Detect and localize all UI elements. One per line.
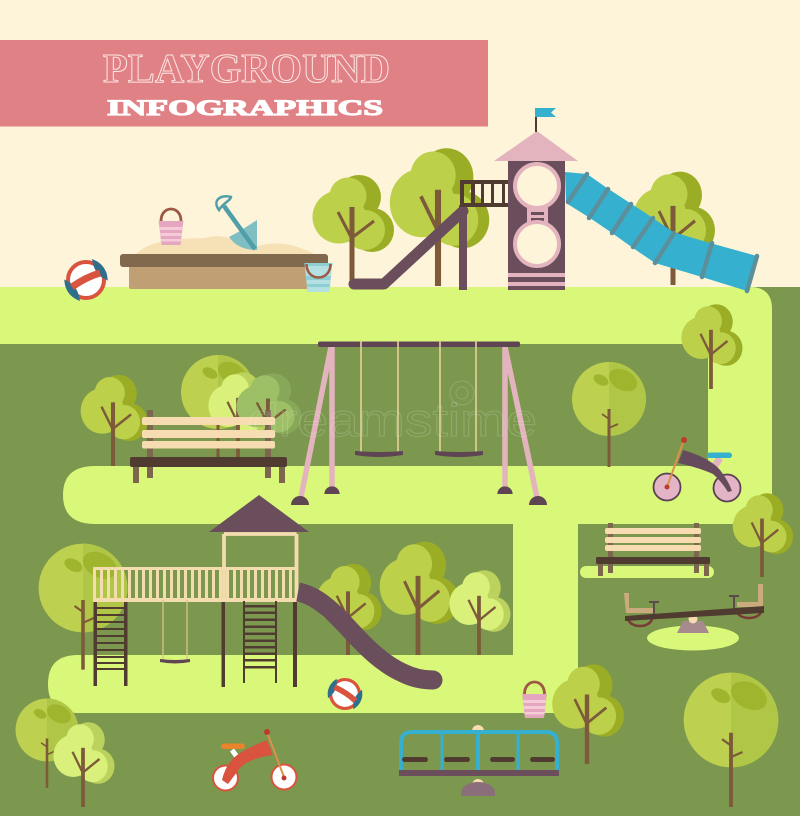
icon: beach ball lower <box>324 673 366 715</box>
tree <box>312 175 394 281</box>
tree mid <box>316 564 382 655</box>
tree left of bench <box>81 375 147 466</box>
wavy slide <box>298 592 433 680</box>
pale tree behind bench <box>208 372 270 457</box>
icon: beach ball top <box>66 262 106 298</box>
tower flag <box>535 108 556 132</box>
structure posts <box>222 602 297 687</box>
railing <box>93 567 297 602</box>
tower railing <box>460 180 510 207</box>
left ladder <box>94 602 128 686</box>
swing set <box>291 340 547 505</box>
balance bike red <box>213 729 296 790</box>
tower windows <box>515 164 559 266</box>
tree mid <box>380 542 459 655</box>
watermark <box>248 381 537 446</box>
tree top right <box>681 304 742 389</box>
tricycle pink <box>654 437 740 502</box>
tower <box>494 108 578 290</box>
tree bottom centre <box>552 664 624 764</box>
seesaw <box>624 584 764 633</box>
walking path <box>0 287 772 713</box>
title line 1: PLAYGROUND <box>103 45 390 91</box>
sandbox <box>120 236 328 289</box>
tree <box>390 148 489 286</box>
tube slide <box>565 172 757 291</box>
round tree mid left <box>39 544 127 670</box>
pale tree mid <box>449 570 510 655</box>
round tree right <box>572 362 646 467</box>
swing seats <box>355 451 483 457</box>
tree right of bench <box>733 493 793 577</box>
right ladder <box>243 601 277 683</box>
swing ropes <box>361 340 476 452</box>
playhouse frame <box>224 534 296 600</box>
icon: shovel <box>216 196 257 250</box>
wavy slide end <box>424 670 442 690</box>
icon: pink pail on sandbox <box>158 209 184 245</box>
background sky <box>0 0 800 288</box>
playhouse roof <box>209 495 309 532</box>
tree behind tube slide <box>634 172 715 285</box>
title line 2: INFOGRAPHICS <box>107 95 383 120</box>
title banner <box>0 40 488 126</box>
hanging swing <box>160 600 190 664</box>
round tree behind bench <box>181 355 255 460</box>
bench small <box>596 523 710 576</box>
pale tree bottom left <box>53 722 114 807</box>
round tree bottom left <box>16 699 78 788</box>
round tree bottom right <box>684 673 778 807</box>
merry-go-round <box>399 725 559 796</box>
background grass <box>0 287 800 816</box>
bench large <box>130 410 287 483</box>
small slide <box>354 205 467 290</box>
watermark: dreamstime <box>248 394 537 446</box>
icon: blue pail <box>304 263 332 292</box>
tower roof <box>494 131 578 161</box>
play structure <box>93 495 433 687</box>
muted tree behind bench <box>236 373 302 457</box>
icon: pink pail on path <box>522 682 547 718</box>
